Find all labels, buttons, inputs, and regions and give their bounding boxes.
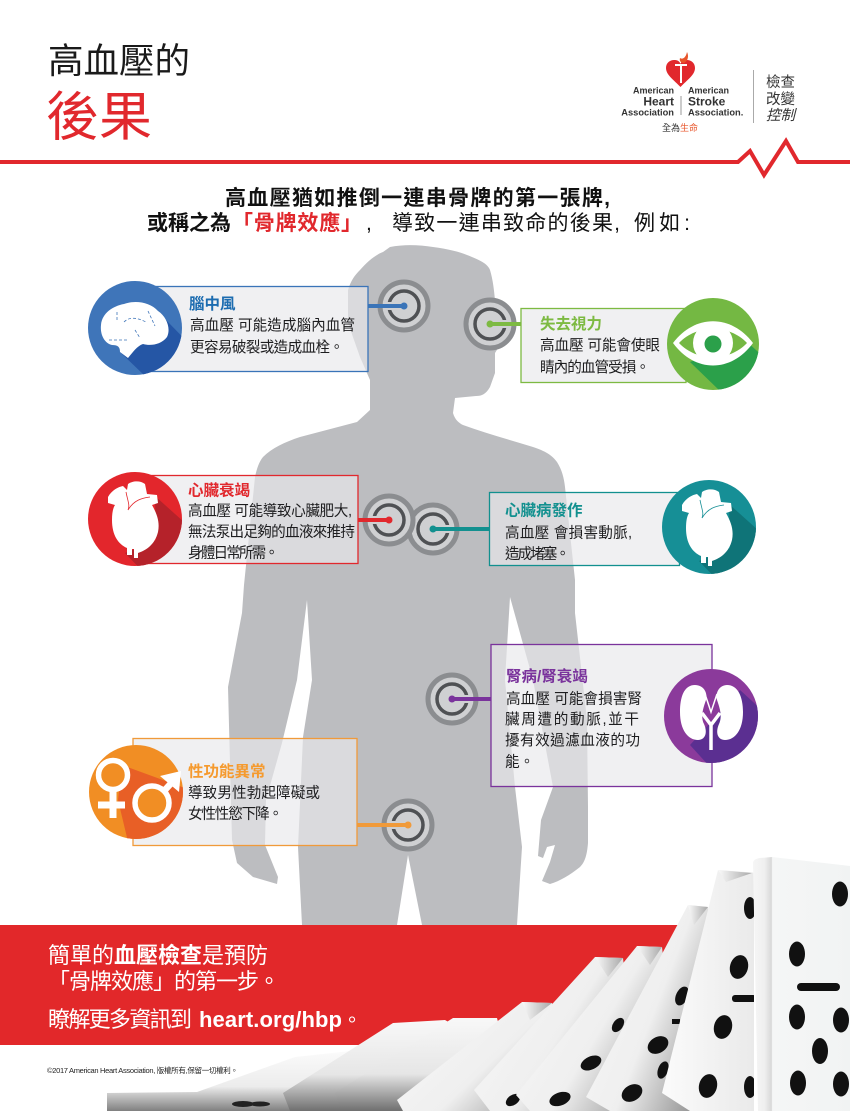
logo: American Heart and American Stroke Association: Stroke [688, 94, 726, 108]
target: brain [368, 282, 428, 330]
text: stroke description: 更容易破裂或造成血栓。 [190, 338, 344, 356]
panel: stroke [88, 281, 369, 375]
text: kidney disease description: 臟周遭的動脈,並干 [505, 711, 639, 728]
text: heart failure description: 高血壓 可能導致心臟肥大, [188, 502, 352, 520]
domino 0: upright [753, 857, 850, 1111]
title [46, 41, 190, 147]
text: stroke description: 高血壓 可能造成腦內血管 [190, 316, 355, 334]
text: call to action [48, 943, 362, 1032]
text: heart failure description: 身體日常所需。 [188, 544, 279, 562]
text: heart failure description [188, 502, 355, 562]
heading: heart attack: 心臟病發作 [505, 500, 583, 520]
text: heart attack description: 高血壓 會損害動脈, [505, 524, 632, 542]
logo: American Heart and American Stroke Association: American [633, 86, 674, 96]
heading: heart failure: 心臟衰竭 [188, 480, 250, 500]
icon: eye [667, 298, 759, 390]
text: heart failure description: 無法泵出足夠的血液來推持 [188, 524, 355, 540]
intro text: 導致一連串致命的後果, [392, 212, 620, 235]
heading: kidney disease: 腎病/腎衰竭 [506, 666, 588, 686]
text: stroke description [190, 316, 355, 356]
domino 3 [516, 946, 680, 1111]
target: kidney [428, 675, 491, 723]
text: call to action: 瞭解更多資訊到 [48, 1007, 192, 1032]
heading: sexual dysfunction: 性功能異常 [188, 762, 266, 780]
logo: American Heart and American Stroke Association: 改變 [766, 91, 795, 108]
panel: heart failure [88, 472, 359, 566]
intro text [147, 186, 690, 235]
logo: American Heart and American Stroke Association: Heart [643, 94, 674, 108]
icon: brain [88, 281, 182, 375]
target: eye [466, 300, 521, 348]
target: heart attack [409, 505, 489, 553]
logo: American Heart and American Stroke Association [621, 52, 797, 133]
logo: American Heart and American Stroke Association: American [688, 86, 729, 96]
red banner [0, 925, 680, 1045]
copyright: ©2017 American Heart Association, 版權所有,保留一切權利。 [47, 1065, 238, 1075]
intro text: 高血壓猶如推倒一連串骨牌的第一張牌, [225, 186, 610, 210]
icon: gender symbols [89, 745, 183, 839]
domino 6 [335, 1018, 520, 1111]
intro text: , [366, 212, 372, 235]
text: call to action: heart.org/hbp [199, 1007, 342, 1032]
dominoes [107, 857, 850, 1111]
heading: vision loss: 失去視力 [540, 314, 602, 333]
domino 2 [586, 905, 720, 1111]
logo: American Heart and American Stroke Association: Association [621, 108, 674, 118]
domino 8: flat [107, 1050, 400, 1111]
text: call to action: 「骨牌效應」的第一步。 [48, 969, 280, 994]
panel: sexual dysfunction [89, 738, 357, 850]
icon: heart [88, 472, 182, 566]
domino 4 [474, 957, 640, 1111]
domino 1: leaning [662, 870, 760, 1111]
text: kidney disease description: 高血壓 可能會損害腎 [506, 690, 642, 708]
text: sexual dysfunction description: 女性性慾下降。 [188, 804, 283, 822]
text: kidney disease description: 擾有效過濾血液的功 [505, 732, 640, 749]
text: vision loss description [540, 337, 660, 376]
text: sexual dysfunction description [188, 784, 320, 822]
target: heart failure [358, 496, 413, 544]
logo: American Heart and American Stroke Association: 檢查 [766, 74, 795, 91]
title: 後果 [46, 88, 152, 147]
text: kidney disease description: 能。 [505, 754, 534, 770]
intro text: 或稱之為 [147, 211, 231, 235]
text: vision loss description: 睛內的血管受損。 [540, 358, 650, 376]
text: heart attack description [505, 524, 632, 562]
text: sexual dysfunction description: 導致男性勃起障礙或 [188, 784, 320, 802]
text: call to action: 簡單的血壓檢查是預防 [48, 943, 268, 968]
domino 7 [283, 1020, 480, 1111]
icon: heart and torch [666, 52, 695, 87]
text: heart attack description: 造成堵塞。 [505, 544, 570, 562]
text: kidney disease description [505, 690, 642, 770]
intro text: 例如: [634, 212, 690, 235]
logo: American Heart and American Stroke Association: Association. [688, 108, 743, 118]
panel: vision loss [520, 298, 759, 390]
panel: kidney disease [490, 644, 758, 788]
icon: heart [662, 480, 756, 574]
domino 5 [397, 1002, 590, 1111]
body silhouette [228, 245, 588, 925]
logo: American Heart and American Stroke Association: 控制 [766, 107, 797, 124]
logo: American Heart and American Stroke Association: 全為生命 [662, 122, 698, 133]
panel: heart attack [488, 480, 756, 574]
title: 高血壓的 [48, 41, 190, 81]
intro text: 「骨牌效應」 [232, 211, 362, 235]
icon: kidneys [664, 669, 758, 763]
heading: stroke: 腦中風 [189, 295, 236, 313]
header rule with heartbeat line [0, 141, 850, 175]
text: call to action: 。 [342, 1010, 362, 1032]
text: vision loss description: 高血壓 可能會使眼 [540, 337, 660, 354]
target: groin [357, 801, 432, 849]
